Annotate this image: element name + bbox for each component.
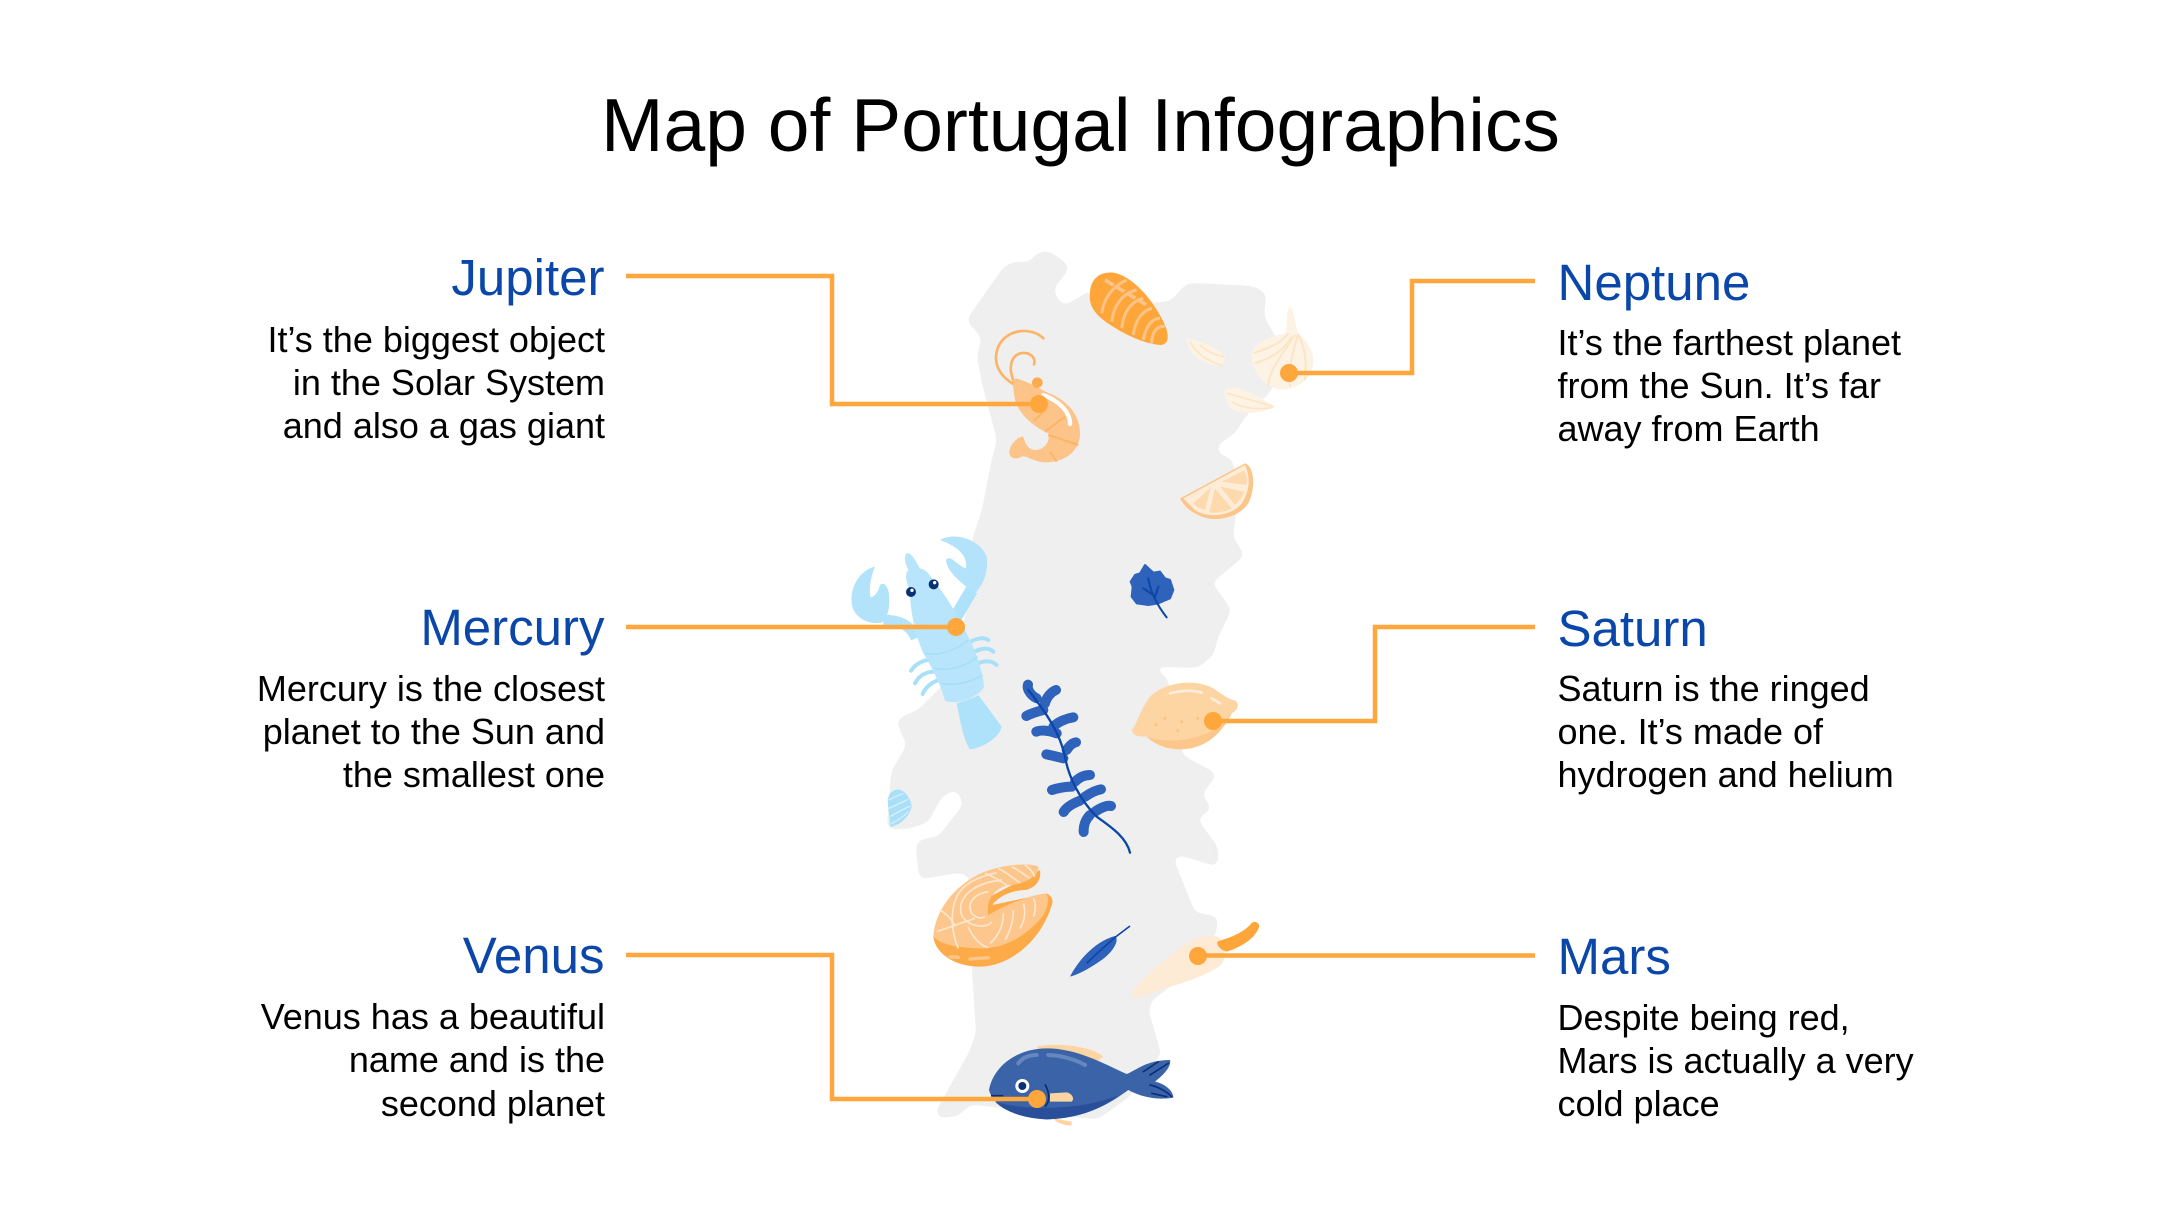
text block: Venus: Venus (463, 927, 604, 984)
text block: Mercury: the smallest one (343, 754, 605, 795)
text block: Venus: name and is the (349, 1039, 605, 1080)
text block: Neptune: from the Sun. It’s far (1558, 365, 1881, 406)
text block: Saturn: one. It’s made of (1558, 711, 1824, 752)
connector: Venus to fish (626, 955, 1046, 1108)
icon: shrimp (996, 331, 1080, 462)
text block: Mercury: Mercury (420, 599, 605, 656)
text block: Mercury: Mercury is the closest (257, 668, 605, 709)
icon: shell (888, 789, 912, 827)
connector: Mercury to lobster (626, 618, 965, 636)
connector: Saturn to lemon (1204, 627, 1535, 730)
icon: garlic (1187, 307, 1314, 413)
text block: Neptune: It’s the farthest planet (1558, 322, 1901, 363)
text block: Jupiter: Jupiter (451, 249, 605, 306)
text block: Jupiter (267, 249, 605, 446)
text block: Mars: cold place (1558, 1083, 1720, 1124)
map of Portugal (890, 254, 1285, 1116)
text block: Mars: Despite being red, (1558, 997, 1850, 1038)
connector: Mars to pale shape (1189, 947, 1535, 965)
connector: Jupiter to shrimp (626, 276, 1048, 413)
icon: slim leaf (1070, 926, 1130, 977)
text block: Mars: Mars is actually a very (1558, 1040, 1914, 1081)
icon: fish (989, 1045, 1173, 1126)
text block: Jupiter: and also a gas giant (283, 405, 605, 446)
text block: Venus: second planet (381, 1083, 605, 1124)
text block: Mercury (257, 599, 605, 795)
icon: blue leaf (1131, 565, 1173, 617)
text block: Neptune (1558, 254, 1901, 449)
text block: Mars: Mars (1558, 928, 1671, 985)
text block: Venus: Venus has a beautiful (261, 996, 605, 1037)
icon: pale chili shape (1131, 922, 1259, 997)
text block: Saturn: Saturn is the ringed (1558, 668, 1870, 709)
icon: seaweed (1026, 685, 1130, 853)
text block: Venus (261, 927, 605, 1124)
text block: Saturn: hydrogen and helium (1558, 754, 1894, 795)
text block: Jupiter: It’s the biggest object (267, 319, 605, 360)
icon: lobster (851, 536, 1002, 749)
text block: Neptune: Neptune (1558, 254, 1750, 311)
icon: mussel (1090, 272, 1168, 345)
text block: Neptune: away from Earth (1558, 408, 1820, 449)
text block: Jupiter: in the Solar System (293, 362, 605, 403)
title: Map of Portugal Infographics (601, 83, 1560, 167)
text block: Mars (1558, 928, 1914, 1124)
icon: lemon (1132, 683, 1238, 749)
text block: Mercury: planet to the Sun and (263, 711, 605, 752)
text block: Saturn (1558, 600, 1894, 795)
icon: orange slice (1180, 463, 1253, 519)
icon: salmon steak (933, 865, 1053, 967)
connector: Neptune to garlic (1280, 281, 1535, 382)
text block: Saturn: Saturn (1558, 600, 1708, 657)
